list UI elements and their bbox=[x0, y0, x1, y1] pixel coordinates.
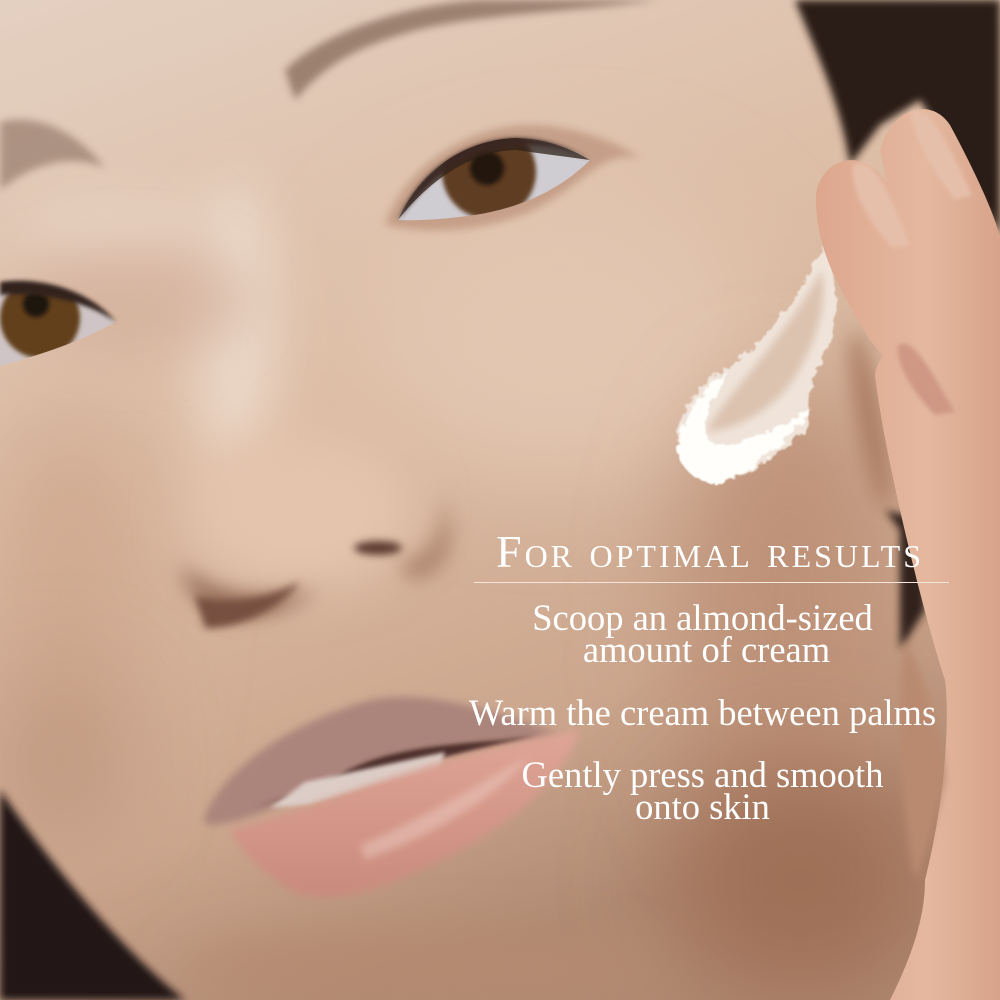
lips bbox=[205, 697, 580, 897]
text block: instructions bbox=[468, 526, 936, 827]
heading: for optimal results: For optimal results bbox=[496, 526, 924, 577]
left eye bbox=[0, 277, 116, 366]
step 3 bbox=[522, 754, 883, 827]
hair: bottom left bbox=[0, 790, 185, 1000]
cream swipe bbox=[676, 245, 836, 483]
step 1 bbox=[532, 597, 873, 670]
step 3: Gently press and smooth bbox=[522, 754, 883, 795]
eyebrows bbox=[0, 0, 660, 190]
step 3: onto skin bbox=[635, 786, 770, 827]
step 2: Warm the cream between palms bbox=[469, 692, 936, 733]
step 1: Scoop an almond-sized bbox=[532, 597, 873, 638]
hair: top right bbox=[795, 0, 1000, 650]
right eye bbox=[385, 125, 640, 231]
face shading bbox=[0, 180, 930, 1000]
nose bbox=[180, 430, 450, 628]
fingers bbox=[816, 109, 1000, 1000]
step 1: amount of cream bbox=[583, 629, 830, 670]
heading rule bbox=[474, 582, 949, 583]
